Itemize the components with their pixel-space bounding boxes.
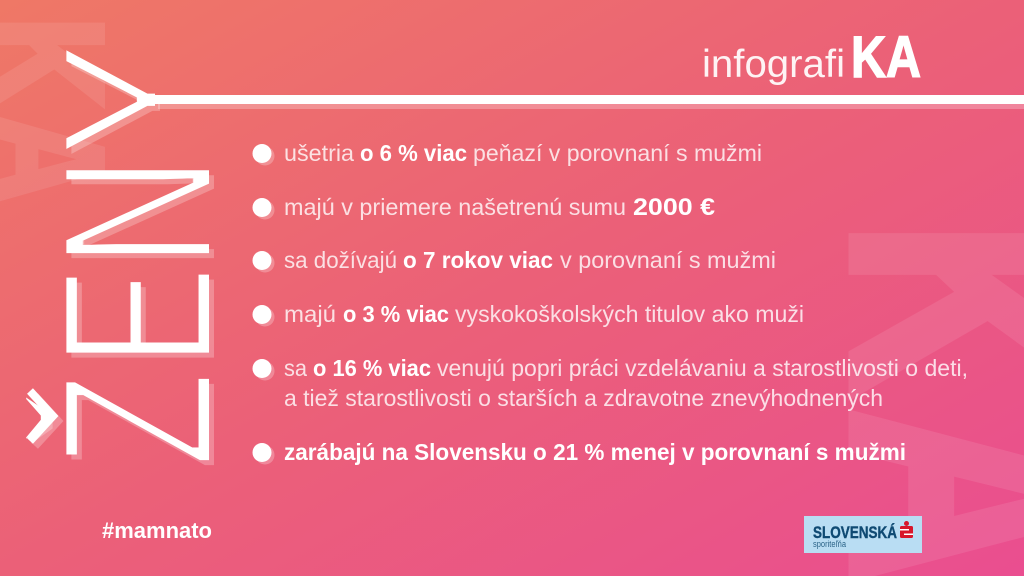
hashtag: #mamnato: [102, 518, 212, 543]
list item 3: [252, 247, 776, 273]
list item 4: [252, 301, 804, 327]
heading: ŽENY vertical lettering: N: [17, 156, 258, 268]
list item 2: majú v priemere našetrenú sumu: [284, 194, 626, 220]
logo: Slovenská sporiteľňa: sporiteľňa: [813, 539, 846, 549]
list item 6: zarábajú na Slovensku o 21 % menej v porovnaní s mužmi: [284, 439, 906, 465]
list item 1: [252, 140, 762, 166]
heading: ŽENY vertical lettering: E: [16, 266, 258, 367]
logo: Slovenská sporiteľňa: SLOVENSKÁ: [813, 523, 897, 542]
heading: ŽENY vertical lettering: Ž: [17, 372, 258, 467]
list item 2: 2000 €: [633, 194, 715, 221]
list item 3: o 7 rokov viac: [403, 247, 553, 273]
title: infografiKA: [702, 25, 921, 90]
horizontal rule from the letter Y: [152, 95, 1024, 109]
list item 3: v porovnaní s mužmi: [560, 247, 776, 273]
list item 4: o 3 % viac: [343, 301, 449, 327]
list item 5: [252, 355, 968, 411]
list item 5: sa: [284, 355, 307, 381]
list item 5: a tiež starostlivosti o starších a zdravotne znevýhodnených: [284, 385, 883, 411]
title: infografiKA: KA: [851, 25, 921, 90]
heading: ŽENY vertical lettering: Y: [16, 41, 258, 158]
list item 1: peňazí v porovnaní s mužmi: [473, 140, 762, 166]
list item 3: sa dožívajú: [284, 247, 397, 273]
list item 5: venujú popri práci vzdelávaniu a starostlivosti o deti,: [437, 355, 968, 381]
icon: red savings bank S: [900, 521, 913, 538]
watermark: KA left: [0, 16, 137, 206]
list item 1: o 6 % viac: [360, 140, 467, 166]
list item 4: majú: [284, 301, 336, 327]
list item 5: o 16 % viac: [313, 355, 431, 381]
heading: ŽENY vertical lettering: [26, 50, 214, 466]
title: infografiKA: infografi: [702, 43, 845, 86]
logo: Slovenská sporiteľňa: [804, 516, 922, 553]
watermark: KA right: [781, 220, 1024, 576]
list item 1: ušetria: [284, 140, 354, 166]
list item 4: vyskokoškolských titulov ako muži: [455, 301, 804, 327]
icon: enlarged caron accent of Ž: [30, 391, 58, 446]
